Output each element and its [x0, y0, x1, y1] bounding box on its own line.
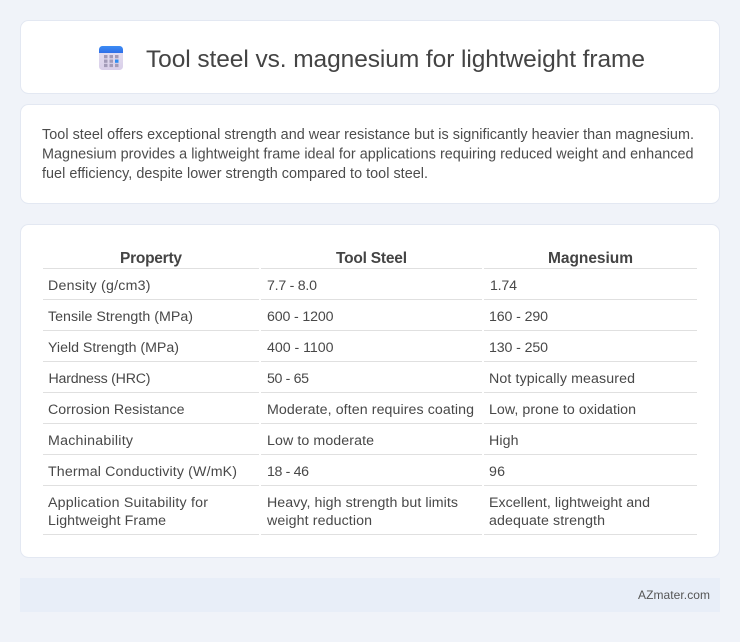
row: application suitability: Excellent, lightweight and	[489, 495, 650, 511]
table header row: Tool Steel	[336, 250, 407, 267]
row: tensile strength: Tensile Strength (MPa)	[48, 309, 193, 325]
row: thermal conductivity: 18 - 46	[267, 464, 309, 480]
panel: header	[20, 20, 720, 94]
row: yield strength	[48, 340, 548, 356]
row: tensile strength: 160 - 290	[489, 309, 548, 325]
row: yield strength: 400 - 1100	[267, 340, 334, 356]
summary text: Magnesium provides a lightweight frame ideal for applications requiring reduced weight and enhanced	[42, 146, 694, 162]
footer	[20, 578, 720, 612]
row: hardness: 50 - 65	[267, 371, 309, 387]
row: hardness	[48, 371, 635, 387]
row: corrosion resistance: Moderate, often requires coating	[267, 402, 474, 418]
row: tensile strength	[48, 309, 548, 325]
row: thermal conductivity: Thermal Conductivity (W/mK)	[48, 464, 237, 480]
row: application suitability: weight reduction	[266, 513, 372, 529]
panel: summary	[20, 104, 720, 204]
row: application suitability: Lightweight Frame	[48, 513, 166, 529]
row: application suitability	[48, 495, 650, 529]
row: density	[48, 278, 517, 294]
summary text: fuel efficiency, despite lower strength compared to tool steel.	[42, 166, 428, 182]
title: Tool steel vs. magnesium for lightweight frame	[146, 46, 645, 73]
row: corrosion resistance: Corrosion Resistance	[48, 402, 185, 418]
row: machinability: High	[489, 433, 518, 449]
row: density: Density (g/cm3)	[48, 278, 150, 294]
row: machinability	[48, 433, 518, 449]
summary text: Tool steel offers exceptional strength and wear resistance but is significantly heavier than magnesium.	[42, 127, 694, 143]
table header row	[120, 250, 633, 267]
row: yield strength: 130 - 250	[489, 340, 548, 356]
icon: calendar	[99, 46, 123, 70]
row: corrosion resistance: Low, prone to oxidation	[489, 402, 636, 418]
row: tensile strength: 600 - 1200	[267, 309, 334, 325]
panel: comparison table	[20, 224, 720, 558]
row: machinability: Machinability	[48, 433, 134, 449]
row: hardness: Not typically measured	[489, 371, 635, 387]
row: density: 1.74	[490, 278, 517, 294]
row: application suitability: Application Suitability for	[48, 495, 208, 511]
row: yield strength: Yield Strength (MPa)	[48, 340, 179, 356]
row: machinability: Low to moderate	[267, 433, 374, 449]
row: application suitability: Heavy, high strength but limits	[267, 495, 458, 511]
summary text	[42, 127, 694, 182]
footer text: AZmater.com	[638, 588, 710, 602]
table header row: Property	[120, 250, 182, 267]
row: density: 7.7 - 8.0	[267, 278, 317, 294]
row: application suitability: adequate strength	[489, 513, 605, 529]
row: corrosion resistance	[48, 402, 636, 418]
row: thermal conductivity: 96	[489, 464, 505, 480]
table header row: Magnesium	[548, 250, 633, 267]
row: hardness: Hardness (HRC)	[48, 371, 150, 387]
row: thermal conductivity	[48, 464, 505, 480]
